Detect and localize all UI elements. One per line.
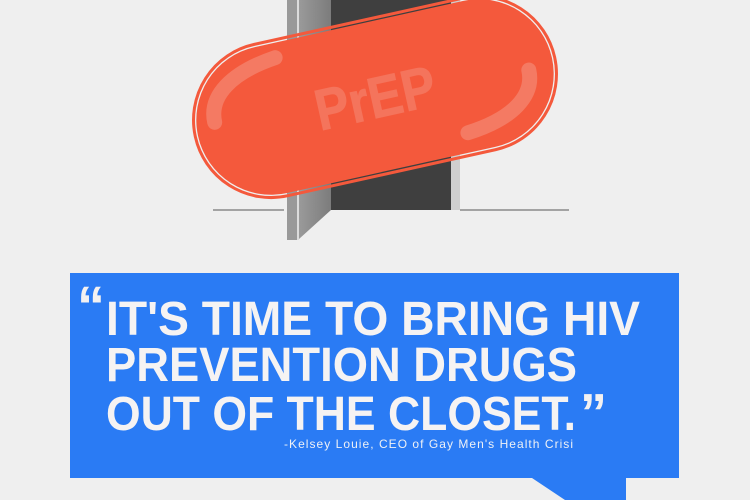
pill highlight right bbox=[458, 70, 539, 133]
quote speech bubble bbox=[70, 273, 679, 500]
icon: PrEP pill bbox=[179, 0, 571, 212]
quote text bbox=[106, 293, 640, 441]
icon: closet door bbox=[213, 0, 569, 240]
pill body bbox=[182, 0, 568, 209]
quote text: PREVENTION DRUGS bbox=[106, 339, 577, 392]
opening quotation mark: “ bbox=[77, 274, 105, 337]
pill highlight left bbox=[204, 58, 286, 122]
closing quotation mark: ” bbox=[580, 383, 607, 443]
quote text: OUT OF THE CLOSET. bbox=[106, 388, 576, 441]
pill label: PrEP bbox=[309, 54, 442, 143]
attribution: -Kelsey Louie, CEO of Gay Men's Health Crisi bbox=[284, 437, 573, 451]
pill outer ring bbox=[179, 0, 571, 212]
quote text: IT'S TIME TO BRING HIV bbox=[106, 293, 640, 346]
